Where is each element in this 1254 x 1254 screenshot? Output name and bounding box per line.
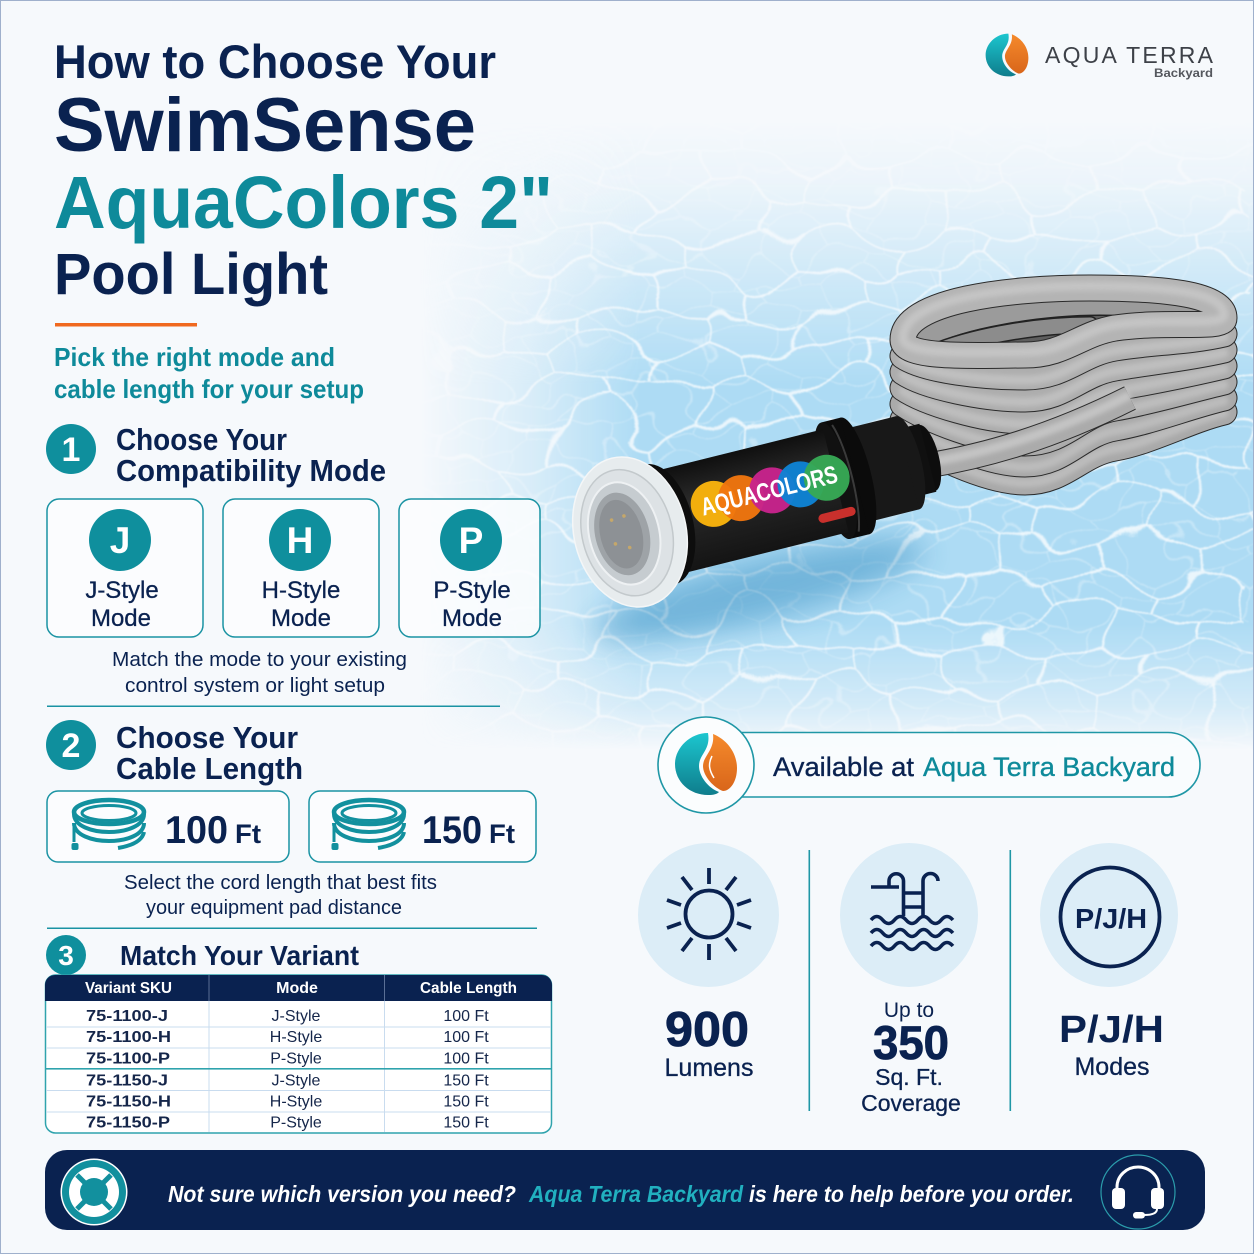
aquacolors badge: [686, 448, 855, 534]
mode card: J: J-Style: [85, 577, 159, 604]
subtitle: cable length for your setup: [54, 374, 364, 404]
help banner: Aqua Terra Backyard: [528, 1181, 744, 1207]
step 1 heading: Choose Your: [116, 422, 287, 457]
table rows: 150 Ft: [443, 1094, 489, 1110]
table rows: J-Style: [272, 1008, 321, 1025]
mode card: H: H-Style: [262, 577, 340, 604]
step 3 heading: Match Your Variant: [120, 940, 359, 971]
step 1 heading: Compatibility Mode: [116, 453, 386, 488]
mode note: Match the mode to your existing: [112, 648, 407, 671]
aquacolors badge: AQUACOLORS: [698, 461, 841, 522]
stat: modes: Modes: [1074, 1053, 1150, 1081]
product: pool light: [557, 381, 957, 619]
lens flange: [557, 445, 703, 619]
table rows: 150 Ft: [443, 1072, 489, 1090]
mode note: [112, 648, 407, 697]
cable card: 150 Ft: [309, 791, 536, 862]
mode card: J: Mode: [91, 605, 151, 632]
icon: headset: [1101, 1155, 1175, 1229]
table rows: H-Style: [270, 1029, 322, 1046]
help banner: Not sure which version you need?: [168, 1181, 516, 1207]
stat: coverage: 350: [873, 1016, 949, 1069]
connector: [806, 397, 953, 543]
title: [54, 35, 553, 307]
cable note: [124, 872, 437, 919]
help banner: is here to help before you order.: [749, 1181, 1074, 1207]
help banner: [45, 1150, 1205, 1230]
table rows: 75-1150-P: [86, 1114, 170, 1132]
table rows: J-Style: [272, 1072, 321, 1090]
subtitle: Pick the right mode and: [54, 342, 335, 372]
icon: life ring: [60, 1158, 128, 1226]
cable note: Select the cord length that best fits: [124, 872, 437, 894]
table rows: 150 Ft: [443, 1114, 489, 1132]
mode note: control system or light setup: [125, 674, 385, 697]
table rows: 75-1100-P: [86, 1050, 170, 1068]
stat: coverage: [840, 843, 978, 1116]
variant table: [45, 975, 552, 1133]
available at pill: Available at: [773, 752, 914, 782]
title: Pool Light: [54, 242, 328, 307]
table rows: 100 Ft: [443, 1008, 489, 1025]
product: coiled cable: [903, 286, 1224, 483]
brand mark: [817, 506, 857, 524]
table rows: 75-1100-H: [86, 1029, 171, 1046]
mode card: P: Mode: [442, 605, 502, 632]
mode card: H: [223, 499, 379, 637]
table rows: P-Style: [270, 1050, 322, 1068]
table rows: 75-1100-J: [86, 1008, 168, 1025]
stat: coverage: Sq. Ft.: [875, 1064, 943, 1090]
mode card: P: [399, 499, 540, 637]
cable layers: [903, 334, 1224, 483]
icon: logo: [675, 733, 737, 795]
table header: Mode: [276, 980, 318, 997]
step 2 heading: [46, 720, 303, 786]
cable card: 100 Ft: Ft: [235, 819, 261, 849]
table header: Cable Length: [420, 980, 517, 997]
cable feed: [925, 395, 1130, 466]
stat: lumens: 900: [665, 1003, 749, 1057]
stat: coverage: Up to: [884, 999, 934, 1022]
logo: Aqua Terra Backyard: Backyard: [1154, 66, 1213, 80]
table rows: 75-1150-H: [86, 1094, 171, 1110]
mode card: H: H: [287, 520, 313, 561]
table rows: 100 Ft: [443, 1050, 489, 1068]
cable card: 150 Ft: Ft: [489, 819, 515, 849]
table header: Variant SKU: [85, 980, 172, 997]
icon: pool ladder: [871, 874, 953, 950]
icon: P/J/H badge: P/J/H: [1075, 903, 1147, 934]
step 3 heading: [46, 935, 359, 975]
step 1 heading: 1: [62, 431, 80, 469]
step 2 heading: Choose Your: [116, 720, 298, 755]
title: How to Choose Your: [54, 35, 496, 88]
mode card: P: P: [459, 520, 483, 561]
title: SwimSense: [54, 83, 476, 168]
product: light shadow: [588, 520, 932, 660]
step 2 heading: 2: [62, 727, 80, 765]
table rows: 100 Ft: [443, 1029, 489, 1046]
table rows: P-Style: [270, 1114, 322, 1132]
logo: Aqua Terra Backyard: [986, 34, 1214, 80]
cable card: 100 Ft: [47, 791, 289, 862]
title: AquaColors 2": [54, 161, 553, 244]
mode card: H: Mode: [271, 605, 331, 632]
tube: [644, 429, 849, 577]
stat: modes: [1040, 843, 1178, 1081]
cable card: 100 Ft: 100: [165, 809, 228, 852]
icon: P/J/H badge: [1060, 868, 1160, 966]
cable note: your equipment pad distance: [146, 897, 402, 919]
icon: cable coil: [332, 800, 404, 850]
mode card: J: J: [110, 520, 130, 561]
table rows: 75-1150-J: [86, 1072, 168, 1090]
stat: lumens: [638, 843, 779, 1082]
available at pill: [658, 717, 1200, 813]
step 2 heading: Cable Length: [116, 751, 303, 786]
stat: modes: P/J/H: [1059, 1009, 1164, 1051]
mode card: J: [47, 499, 203, 637]
stat: coverage: Coverage: [861, 1090, 961, 1116]
top loop: [903, 286, 1224, 356]
table header: [85, 980, 517, 997]
cable card: 150 Ft: 150: [422, 809, 482, 852]
mode card: P: P-Style: [433, 577, 511, 604]
stat: lumens: Lumens: [665, 1054, 753, 1082]
table rows: [86, 1008, 489, 1132]
logo: Aqua Terra Backyard: AQUA TERRA: [1045, 42, 1214, 68]
water background: [450, 169, 1253, 740]
icon: cable coil: [72, 800, 144, 850]
table rows: H-Style: [270, 1094, 322, 1110]
step 1 heading: [46, 422, 386, 488]
icon: sun: [667, 868, 751, 960]
step 3 heading: 3: [58, 940, 74, 971]
available at pill: Aqua Terra Backyard: [923, 752, 1175, 782]
subtitle: [54, 342, 364, 404]
